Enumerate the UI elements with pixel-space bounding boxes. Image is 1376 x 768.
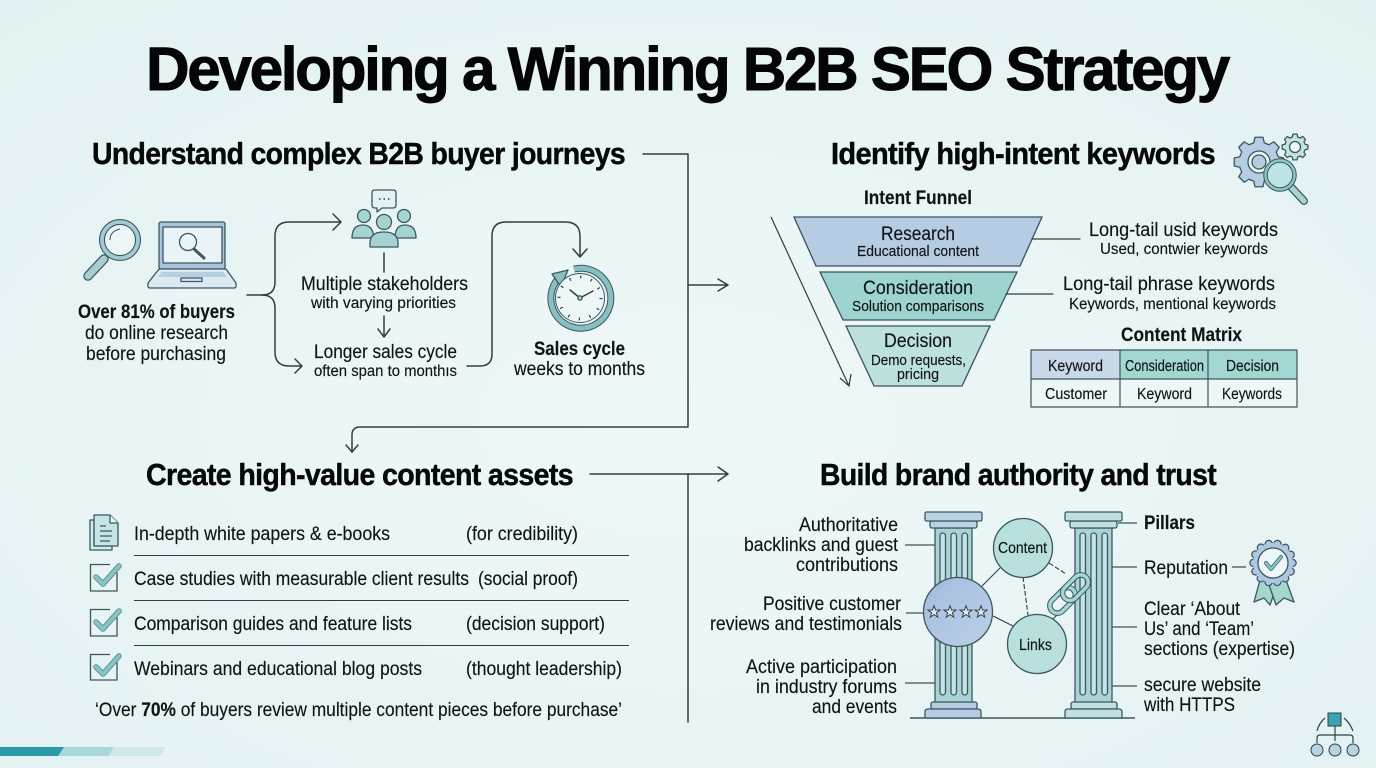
text: 81% of buyers: Over 81% of buyers [78,302,235,323]
icon: content circle [994,518,1052,578]
table: content matrix: Decision [1226,358,1279,375]
heading: brand authority: Build brand authority and trust [820,457,1216,492]
panel: buyer journeys [78,136,645,380]
icon: gears and magnifier [1234,134,1308,201]
list item: comparison guides [134,614,605,635]
callout: about us [1112,599,1295,660]
footer accent bar [0,747,166,756]
connector: stakeholders line [383,253,385,272]
arrow: down [378,316,390,337]
panel: keywords [771,134,1308,407]
callout: https [1112,675,1261,716]
text: sales cycle: weeks to months [513,359,645,380]
icon: left pillar [925,512,982,718]
icon: stars circle [924,578,992,646]
funnel stage: consideration [820,272,1017,320]
funnel stage: decision: Decision [884,331,952,352]
funnel stage: research [794,217,1042,266]
list item: webinars: Webinars and educational blog posts [134,659,422,680]
icon: links circle [1008,614,1066,674]
callout: reviews: reviews and testimonials [710,614,902,635]
icon: check comparison guides [90,610,119,636]
arrow: funnel direction [771,217,851,386]
callout: long-tail usid keywords: Used, contwier keywords [1100,241,1268,258]
callout: long-tail usid keywords [1032,220,1278,258]
icon: check case studies [90,564,119,591]
table: content matrix: Customer [1045,386,1107,403]
arrow: to sales cycle clock [467,222,587,366]
icon: document [90,515,118,550]
funnel stage: decision [846,326,990,386]
callout: backlinks: backlinks and guest [744,535,899,556]
funnel stage: research: Research [881,224,955,245]
table: content matrix: Keyword [1048,358,1103,375]
callout: forums: in industry forums [756,677,897,698]
list item: case studies: (social proof) [478,569,578,590]
title: Developing a Winning B2B SEO Strategy [146,35,1230,103]
text: multiple stakeholders: Multiple stakeholders [301,274,468,295]
funnel stage: decision: Demo requests, [871,353,966,369]
callout: reputation [1112,558,1246,579]
callout: long-tail phrase keywords: Long-tail phrase keywords [1063,274,1275,295]
callout: forums: and events [812,697,897,718]
callout: long-tail phrase keywords: Keywords, mentional keywords [1069,296,1276,313]
heading: keywords: Identify high-intent keywords [831,136,1215,171]
icon: clock [551,268,611,328]
funnel stage: decision: pricing [897,367,939,383]
callout: long-tail usid keywords: Long-tail usid keywords [1089,220,1278,241]
text: 81% of buyers [78,302,235,365]
quote: 70% of buyers: ‘Over 70% of buyers review multiple content pieces before purchase’ [95,700,622,721]
icon: check webinars [90,654,119,680]
list item: webinars [134,659,622,680]
list item: white papers [134,524,578,545]
callout: about us: Us’ and ‘Team’ [1144,619,1254,640]
list item: comparison guides: (decision support) [466,614,605,635]
text: 81% of buyers: before purchasing [86,344,226,365]
ground line [910,717,1135,719]
callout: reviews: Positive customer [763,594,902,615]
heading: intent funnel: Intent Funnel [864,188,972,209]
list item: case studies: Case studies with measurable client results [134,569,469,590]
icon: laptop [148,222,236,288]
heading: buyer journeys: Understand complex B2B buyer journeys [92,136,625,171]
callout: forums [746,657,935,718]
icon: award badge [1253,543,1294,605]
arrow: split bracket [247,214,341,373]
funnel stage: consideration: Consideration [863,278,973,299]
list item: comparison guides: Comparison guides and feature lists [134,614,412,635]
callout: reputation: Reputation [1144,558,1228,579]
callout: about us: sections (expertise) [1144,639,1295,660]
callout: about us: Clear ‘About [1144,599,1241,620]
text: longer sales cycle [314,342,457,380]
panel: brand authority [710,457,1295,718]
table: content matrix: Keywords [1222,386,1282,403]
callout: backlinks [744,515,935,576]
table: content matrix [1031,350,1297,407]
heading: content matrix: Content Matrix [1121,325,1242,346]
callout: pillars [1118,513,1195,534]
heading: content assets: Create high-value content assets [146,457,573,492]
panel: content assets [90,457,629,721]
icon: magnifying glass [88,222,138,276]
list item: white papers: (for credibility) [466,524,578,545]
text: sales cycle: Sales cycle [534,339,625,360]
icon: org chart [1311,713,1359,756]
callout: reviews [710,594,924,635]
icon: chain [1047,572,1091,616]
list item: white papers: In-depth white papers & e-books [134,524,390,545]
callout: pillars: Pillars [1144,513,1195,534]
icon: right pillar [1065,512,1122,718]
text: multiple stakeholders: with varying priorities [310,295,456,312]
callout: backlinks: Authoritative [799,515,898,536]
table: content matrix: Keyword [1137,386,1192,403]
icon: links circle: Links [1019,637,1052,654]
funnel stage: consideration: Solution comparisons [852,299,984,315]
list item: webinars: (thought leadership) [466,659,622,680]
callout: forums: Active participation [746,657,897,678]
funnel stage: research: Educational content [857,244,979,260]
icon: stakeholders group [352,190,416,247]
text: 81% of buyers: do online research [85,323,228,344]
text: longer sales cycle: often span to monthıs [314,363,457,380]
text: multiple stakeholders [301,274,468,312]
callout: long-tail phrase keywords [1006,274,1276,313]
text: sales cycle [513,339,645,380]
table: content matrix: Consideration [1125,358,1204,375]
network connections [982,563,1066,626]
callout: https: secure website [1144,675,1261,696]
icon: content circle: Content [998,540,1048,557]
callout: https: with HTTPS [1143,695,1235,716]
connector lines between sections [346,154,728,722]
text: longer sales cycle: Longer sales cycle [314,342,457,363]
callout: backlinks: contributions [796,555,898,576]
